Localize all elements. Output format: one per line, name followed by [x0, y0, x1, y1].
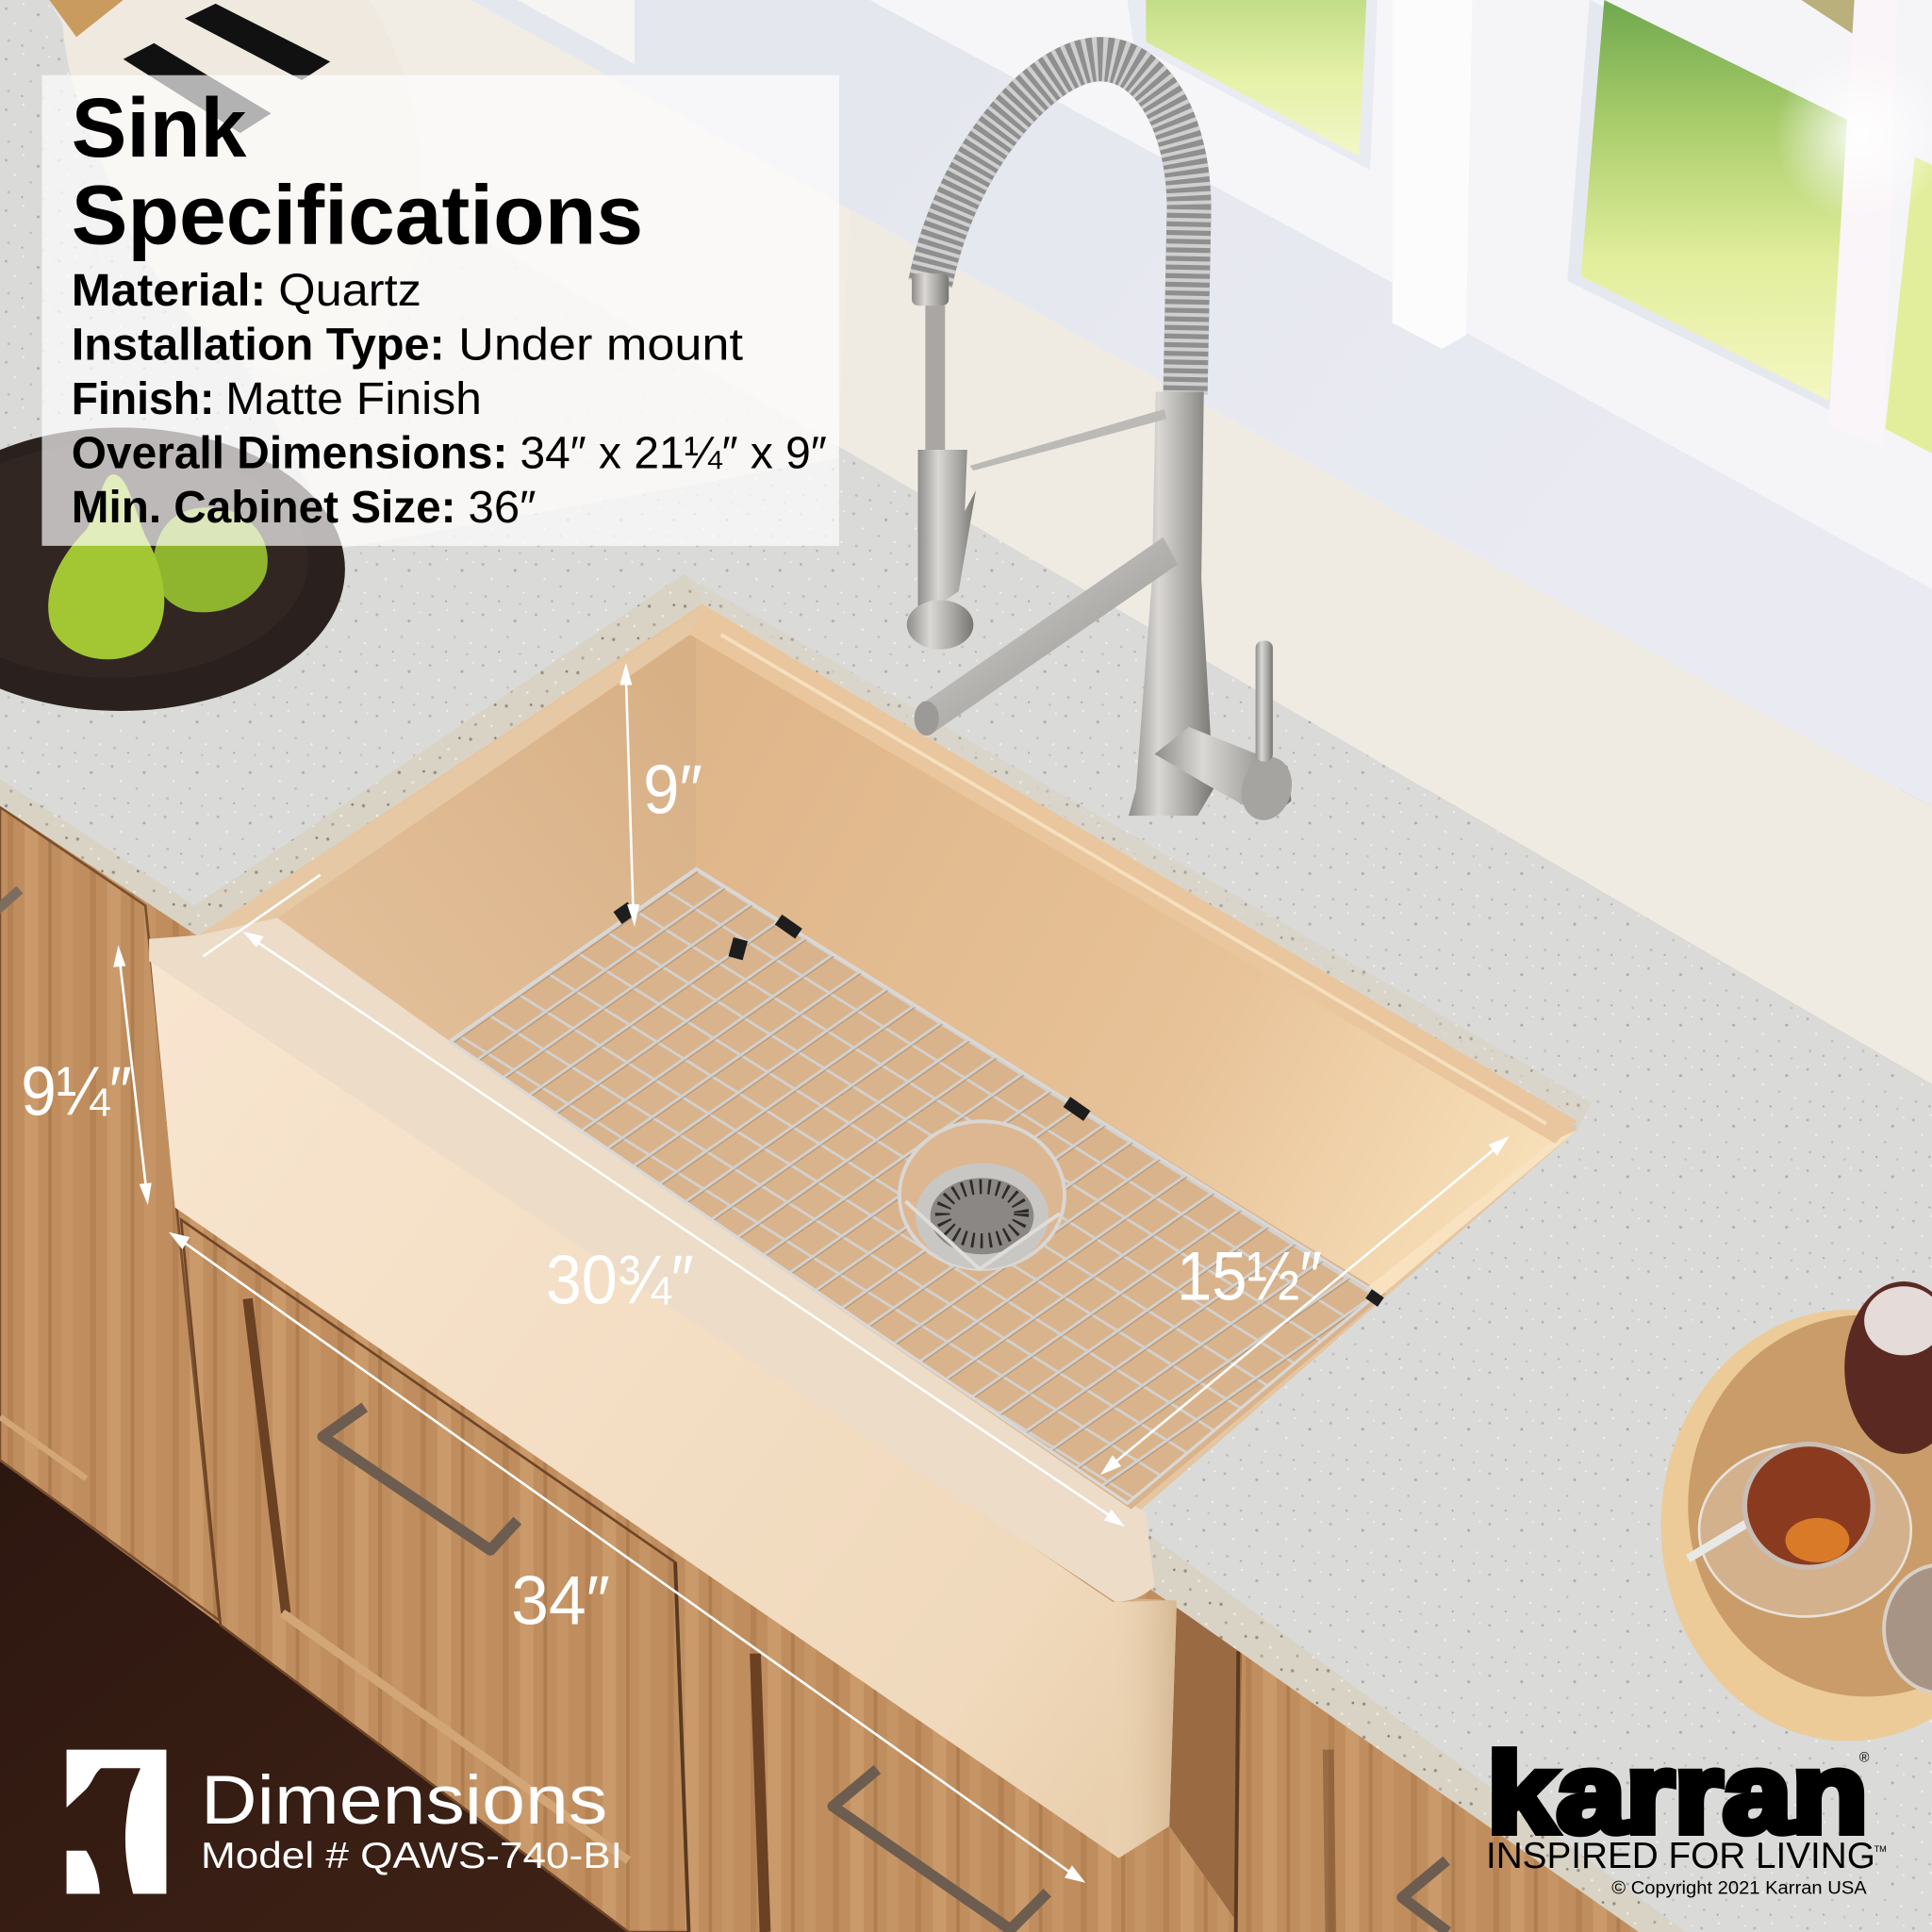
window glass upper: [1801, 0, 1868, 43]
faucet: [907, 59, 1298, 826]
spec: installation type: Under mount: [458, 320, 744, 371]
spec: finish: Matte Finish: [225, 373, 482, 424]
window mullion: [1828, 0, 1897, 449]
spec: installation type: Installation Type:: [72, 320, 445, 371]
faucet arm: [969, 409, 1167, 471]
dimension: 9 1/4 inch apron height: 9¼″: [21, 1053, 132, 1131]
logo: Karran: [1486, 1730, 1887, 1898]
sun glare: [1775, 49, 1932, 222]
faucet column: [1129, 392, 1214, 816]
spec: material: Material:: [72, 265, 266, 316]
teapot: [1844, 1281, 1932, 1454]
spec: material: Quartz: [278, 265, 421, 316]
faucet sprayer: [907, 450, 976, 650]
dish grid: [450, 868, 1384, 1503]
dimension: 9 inch depth: [619, 663, 702, 927]
window glass left: [1146, 0, 1366, 157]
spec: min cabinet size: 36″: [469, 482, 536, 533]
window glass right: [1885, 157, 1932, 454]
spec: overall dimensions: [72, 428, 827, 479]
sink right wall: [1365, 1130, 1577, 1296]
dimension: 34 inch overall length: [169, 1232, 1085, 1883]
spoon: [1688, 1518, 1756, 1559]
handle drawer 2: [833, 1770, 1048, 1929]
tea cup: [1744, 1445, 1873, 1567]
sink rim back: [690, 606, 1577, 1144]
faucet spout: [916, 537, 1178, 734]
faucet hose: [925, 305, 945, 451]
title: Sink: [72, 81, 247, 174]
plate: [0, 427, 345, 711]
sink underlay: [198, 603, 1577, 1517]
pear front: [48, 474, 164, 659]
handle left door: [0, 889, 20, 912]
saucer: [1699, 1445, 1911, 1616]
marble sill: [74, 0, 1932, 1084]
grid feet: [614, 902, 636, 924]
translucent specifications panel: [41, 75, 839, 546]
spec: finish: Finish:: [72, 373, 214, 424]
dimension: 15 1/2 inch basin width: 15½″: [1177, 1238, 1322, 1315]
floor: [0, 1461, 628, 1932]
faucet coil: [931, 59, 1189, 394]
dimension: 30 3/4 inch basin length: 30¾″: [546, 1242, 694, 1319]
heading: Dimensions: Dimensions: [201, 1761, 607, 1839]
toaster: [61, 0, 422, 376]
faucet handle body: [1154, 727, 1291, 819]
spec: min cabinet size: Min. Cabinet Size:: [72, 482, 456, 533]
icon: R mark: [67, 1750, 166, 1893]
spec: finish: [72, 373, 482, 424]
sink back wall: [696, 628, 1555, 1291]
jar: [1884, 1565, 1932, 1693]
drain: [900, 1121, 1065, 1269]
model number: Model # QAWS-740-BI: [201, 1836, 622, 1876]
cabinet door left: [0, 807, 220, 1620]
tagline: INSPIRED FOR LIVING: [1486, 1836, 1875, 1876]
handle drawer 3: [1402, 1860, 1447, 1932]
toaster slot: [185, 4, 330, 80]
logo: Karran: karran: [1487, 1730, 1868, 1857]
tray with tea set: [1661, 1281, 1932, 1741]
sink top lip: [149, 915, 1154, 1602]
wood spoons: [49, 0, 124, 37]
title: [72, 81, 643, 262]
cabinet drawer centre left: [181, 1220, 688, 1932]
dimension: 9 1/4 inch apron height: [21, 945, 152, 1205]
background wood cabinets: [0, 788, 1932, 1932]
window frame: [518, 0, 1932, 589]
dimension: 30 3/4 inch basin length: [204, 875, 1125, 1527]
spec: installation type: [72, 320, 744, 371]
toaster slot: [124, 43, 271, 133]
sink apron right side shadow: [1103, 1597, 1177, 1858]
spec: overall dimensions: 34″ x 21¼″ x 9″: [520, 428, 827, 479]
cabinet right door: [1169, 1602, 1651, 1932]
dimension: 34 inch overall length: 34″: [511, 1561, 610, 1639]
copyright: © Copyright 2021 Karran USA: [1611, 1877, 1868, 1898]
wall: [471, 0, 1932, 807]
faucet hose collar: [912, 273, 949, 305]
counter edge: [0, 574, 1686, 1932]
dimension: 9 inch depth: 9″: [643, 751, 702, 828]
logo: Karran: ®: [1859, 1751, 1870, 1766]
pear back: [154, 507, 268, 612]
counter glare top left: [49, 0, 850, 549]
spec: material: [72, 265, 421, 316]
cabinet drawer centre right: [675, 1562, 765, 1932]
title: Specifications: [72, 169, 643, 262]
sink apron: [149, 943, 1177, 1858]
logo: Karran: TM: [1874, 1844, 1887, 1854]
window glass centre: [1581, 0, 1857, 401]
handle drawer 1: [322, 1407, 518, 1550]
dimension: 15 1/2 inch basin width: [1100, 1136, 1510, 1475]
spec: overall dimensions: Overall Dimensions:: [72, 428, 507, 479]
faucet lever: [1256, 641, 1273, 762]
sink left wall: [277, 628, 696, 1041]
sink floor: [450, 868, 1386, 1510]
